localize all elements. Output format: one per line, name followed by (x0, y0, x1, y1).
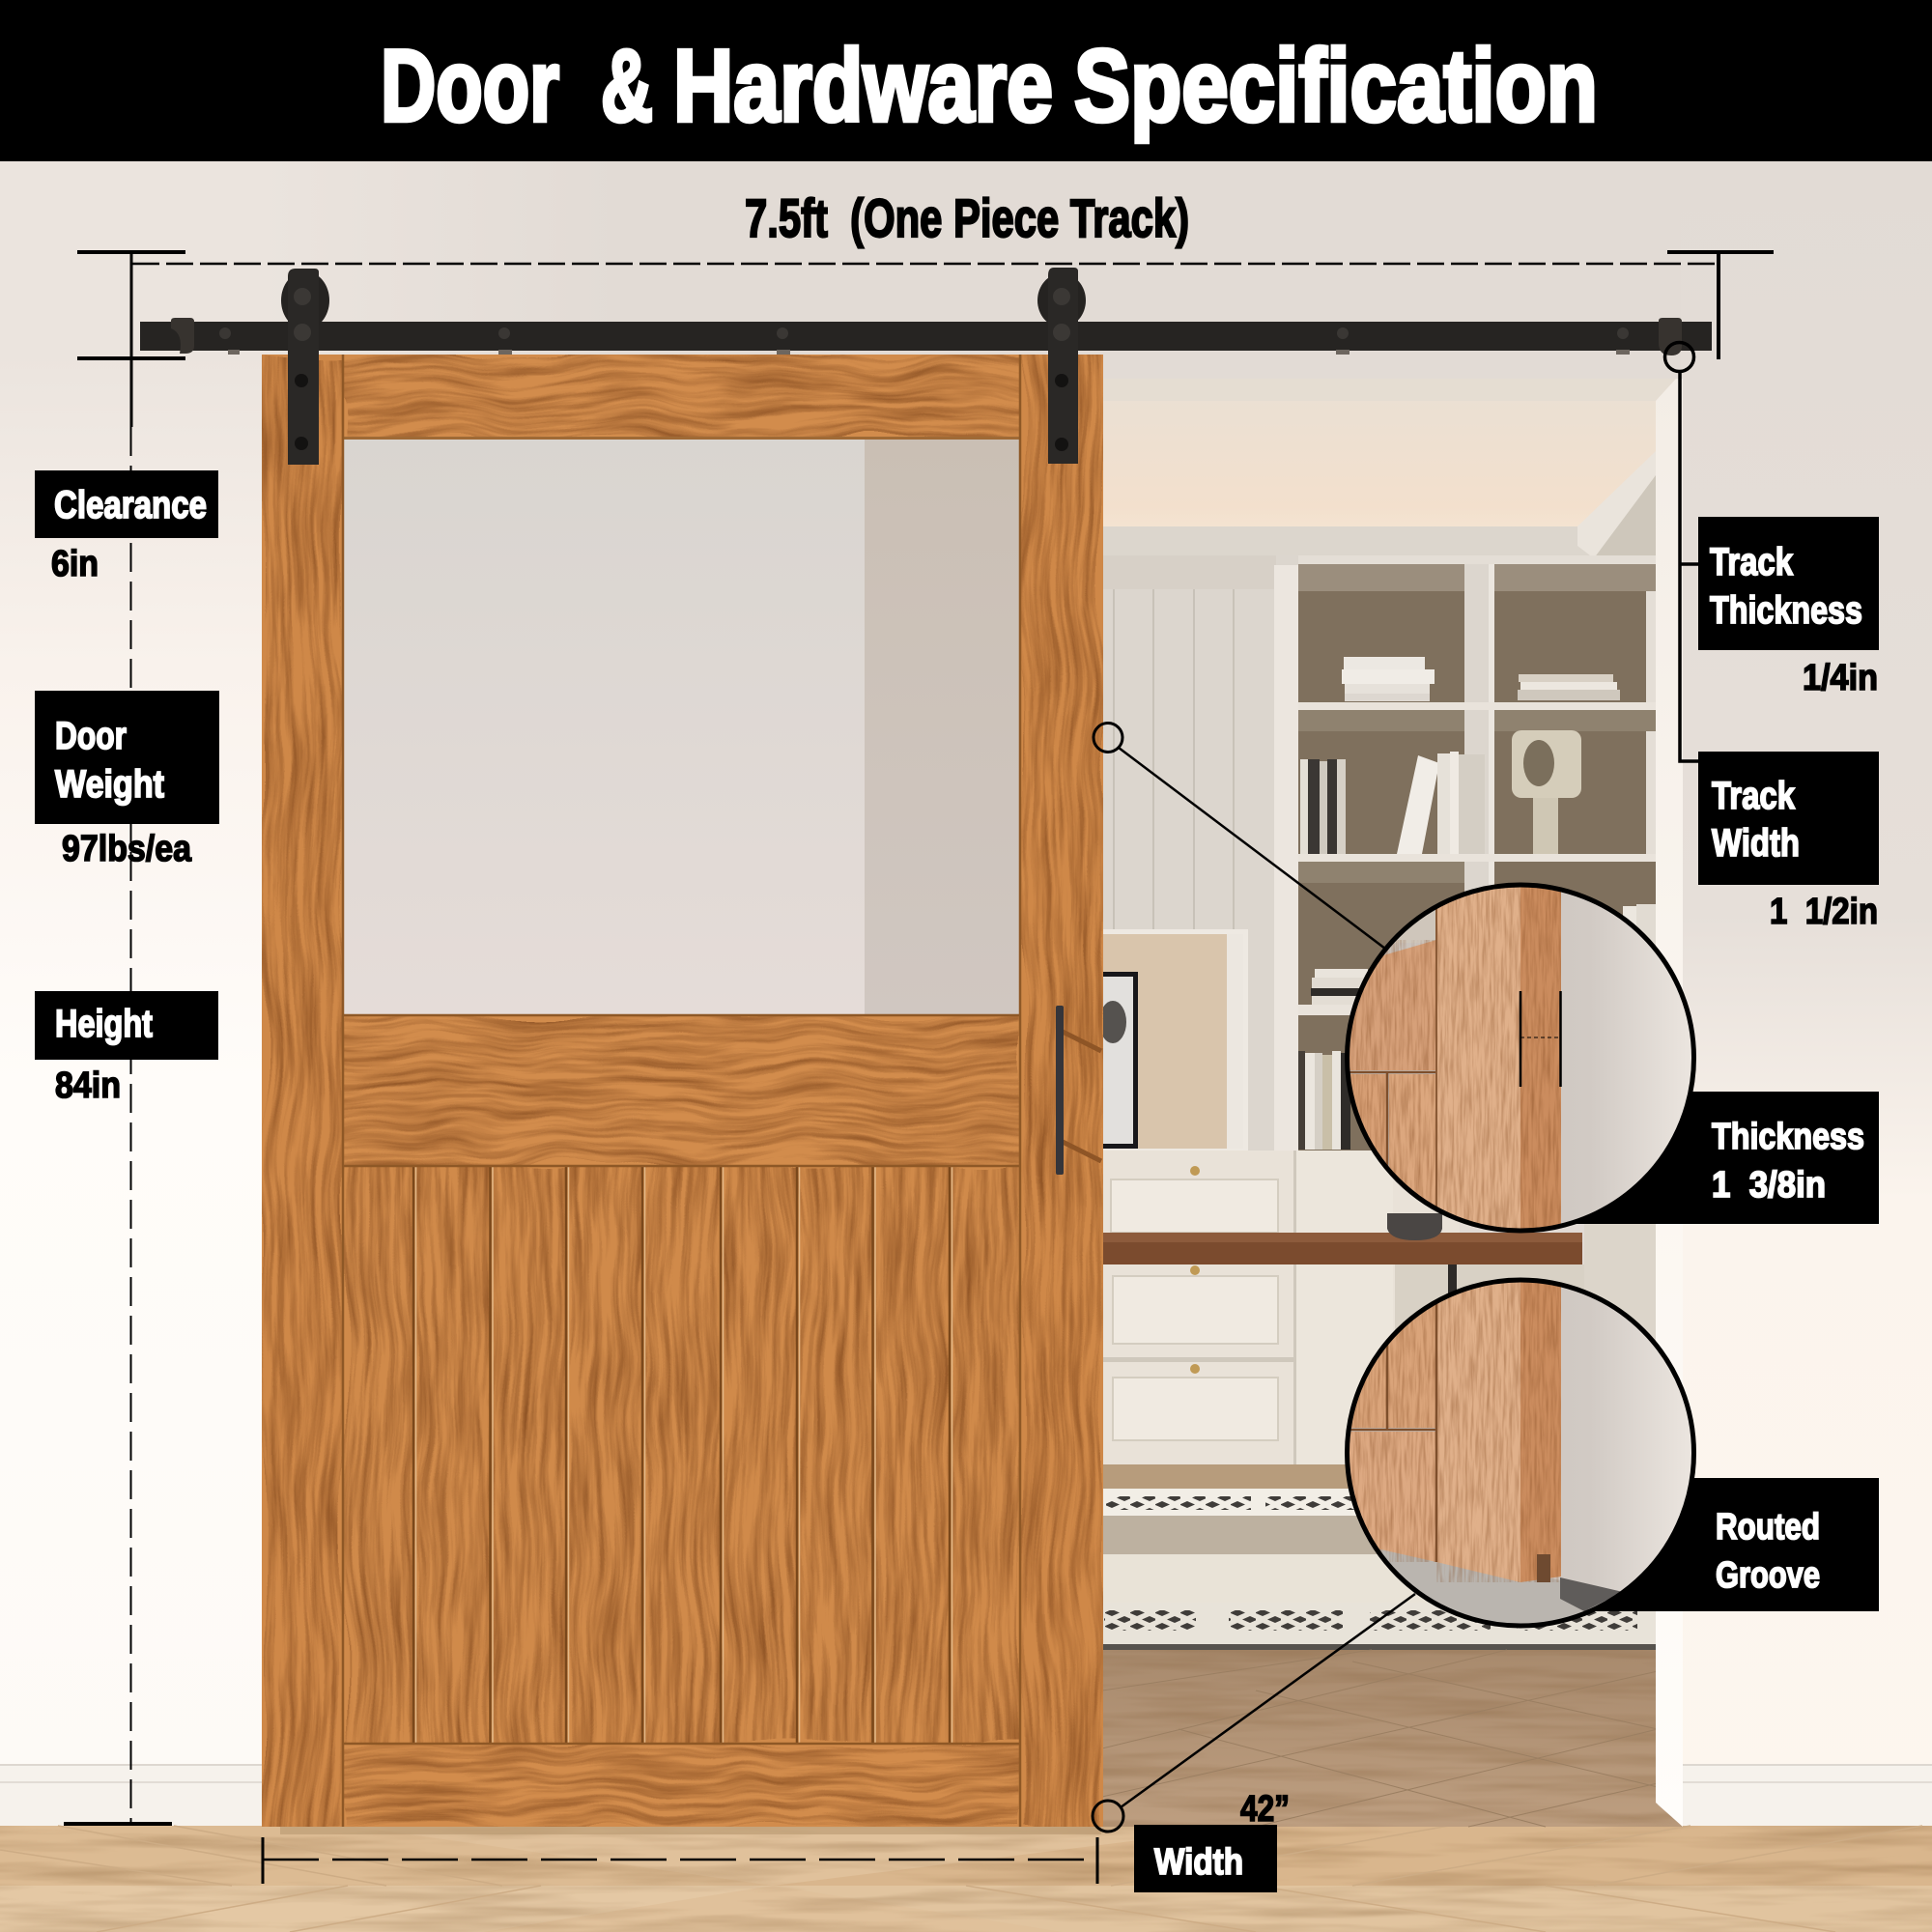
right hanger (1037, 268, 1086, 464)
front floor (0, 1826, 1932, 1932)
label: track thickness: Thickness (1710, 589, 1862, 632)
door rails (343, 355, 1020, 1827)
cabinets (1102, 1151, 1656, 1464)
label: routed groove (1546, 1478, 1879, 1611)
title: Specification (1074, 29, 1598, 143)
door pull handle (1056, 1006, 1064, 1175)
label: routed groove: Groove (1716, 1555, 1820, 1596)
track length dimension (132, 187, 1774, 359)
door (262, 355, 1103, 1827)
table (1102, 1233, 1582, 1303)
track callout leader (1665, 342, 1700, 761)
label: thickness: Thickness (1712, 1117, 1864, 1157)
track bolts (219, 327, 1630, 355)
label: height (35, 991, 218, 1106)
framed art (1099, 929, 1248, 1151)
zoom circle: routed groove (1347, 1279, 1694, 1642)
title: & (601, 29, 653, 143)
label: clearance (35, 470, 218, 584)
label: track width: 1 1/2in (1770, 892, 1878, 932)
label: clearance: Clearance (54, 484, 207, 526)
label: track width: Width (1712, 822, 1800, 865)
label: clearance: 6in (51, 544, 99, 584)
title bar (0, 0, 1932, 161)
soffit (1102, 379, 1676, 401)
label: track width (1698, 752, 1879, 932)
wainscot wall (1102, 555, 1300, 1164)
window glass (343, 437, 1020, 1015)
label: thickness (1546, 1092, 1879, 1224)
bottom width dimension (263, 1837, 1097, 1884)
door seams (343, 355, 1020, 1827)
leader: door edge to thickness zoom (1094, 723, 1385, 949)
back wall corner (1594, 473, 1656, 565)
label: height: Height (55, 1003, 153, 1045)
sliding track (140, 318, 1712, 355)
label: routed groove: Routed (1716, 1507, 1820, 1548)
crown moulding (1102, 451, 1656, 558)
shelf items (1298, 657, 1656, 1150)
left height dimension (64, 252, 185, 1824)
inner floor and rug (1102, 1464, 1683, 1827)
label: door weight: 97lbs/ea (62, 829, 192, 869)
groove notch (1537, 1554, 1550, 1582)
label: track width: Track (1712, 775, 1796, 817)
thickness marks (1520, 991, 1561, 1087)
label: track thickness: 1/4in (1803, 658, 1878, 698)
zoom circle: door thickness (1347, 885, 1694, 1238)
left hanger (281, 269, 329, 465)
bookshelf (1298, 555, 1656, 1164)
label: door weight (35, 691, 219, 869)
label: width 42 in: 42” (1240, 1789, 1290, 1830)
title: Hardware (673, 29, 1053, 143)
leader: door bottom to groove zoom (1093, 1594, 1415, 1832)
label: track thickness (1698, 517, 1879, 698)
room seen through opening (1099, 379, 1683, 1827)
track stoppers (171, 318, 1682, 355)
ceiling (1102, 379, 1682, 562)
label: width 42 in (1134, 1789, 1290, 1892)
label: door weight: Door (55, 715, 127, 757)
label: width 42 in: Width (1154, 1842, 1243, 1883)
handle reflections (1063, 1032, 1101, 1161)
door stiles (262, 355, 1103, 1827)
bowl (1387, 1213, 1442, 1240)
label: track thickness: Track (1710, 541, 1794, 583)
baseboards (0, 1764, 1932, 1827)
track length dimension: 7.5ft (One Piece Track) (745, 187, 1189, 248)
label: height: 84in (55, 1065, 121, 1106)
label: door weight: Weight (55, 763, 164, 806)
title: Door (381, 29, 559, 143)
label: thickness: 1 3/8in (1712, 1165, 1826, 1206)
opening reveal (1656, 379, 1683, 1827)
title (381, 29, 1598, 143)
plank panel (343, 1166, 1020, 1744)
